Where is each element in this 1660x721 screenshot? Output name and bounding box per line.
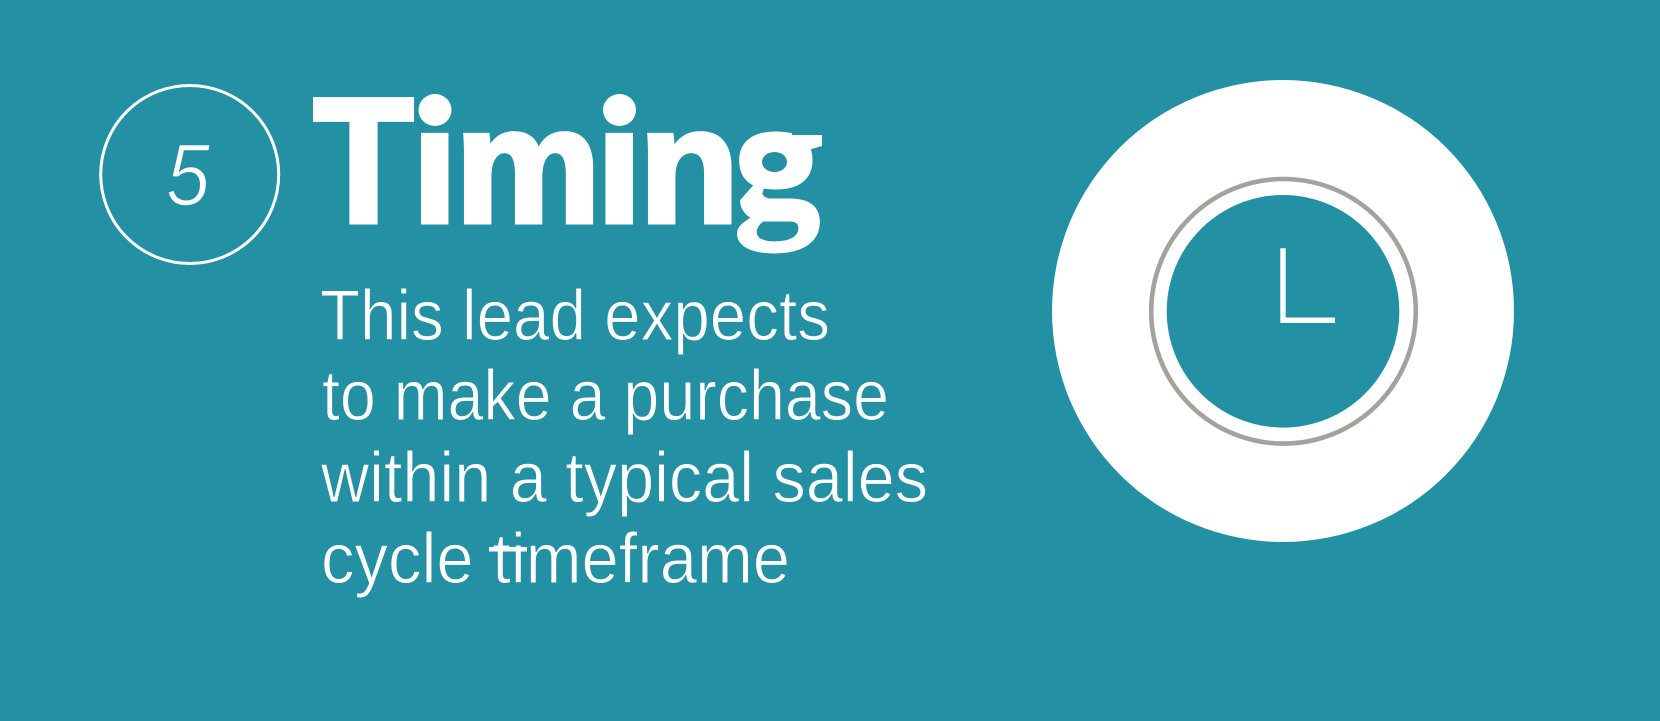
body text: within a typical sales xyxy=(320,439,928,518)
body text: cycle timeframe xyxy=(321,520,790,599)
heading: Timing: imin xyxy=(412,74,739,257)
body text xyxy=(320,277,928,599)
number badge: 5: 5 xyxy=(166,125,211,224)
body text: to make a purchase xyxy=(322,357,889,436)
number badge: 5 xyxy=(101,86,279,264)
heading: Timing: g xyxy=(734,62,820,252)
body text: This lead expects xyxy=(320,277,830,356)
heading: Timing xyxy=(314,61,826,260)
heading: Timing: T xyxy=(314,61,414,260)
clock icon xyxy=(1052,80,1514,542)
